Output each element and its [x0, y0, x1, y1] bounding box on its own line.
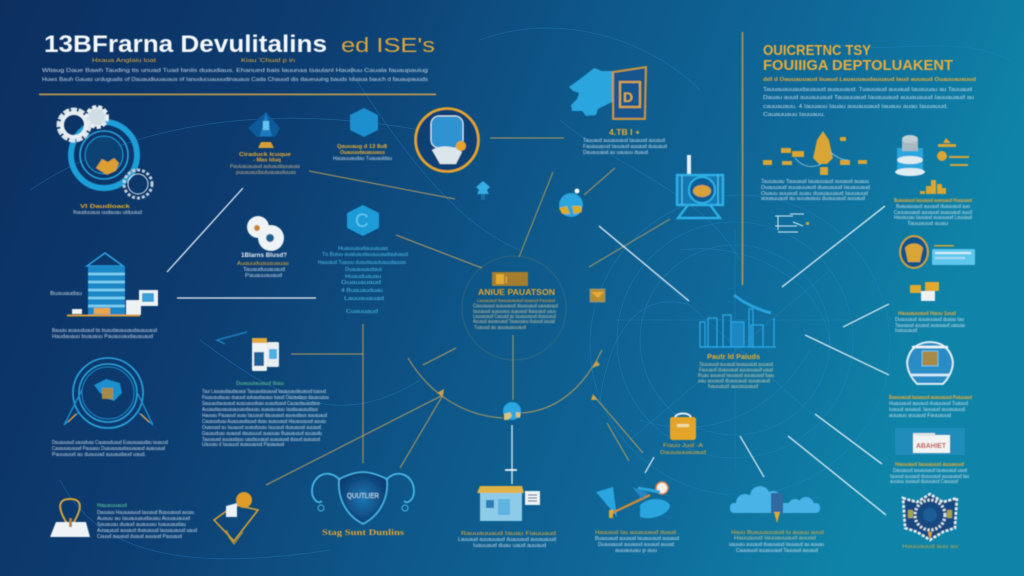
icon: gold badge and card: [900, 236, 975, 268]
title: 13BFrarna Devulitalins: [44, 31, 327, 58]
text: gold network: Tauuauau Tauuaud Iauauuaud auuaud auauu: [761, 179, 869, 185]
text: C hexagon: Guauauaud: [341, 280, 381, 286]
text: phones: Taur Lauuaudaudauaus Tauuaudauauud Iauauuaudauauud tuauud: [202, 389, 326, 395]
label: gears: Ihauduuaua uudauau ulduuiud: [73, 210, 142, 216]
text: C hexagon: Tn Buiuu aualuaudauauuaudauluaud: [322, 252, 408, 258]
text: city: Fauuaud duauuaud auuauuaud uaud: [699, 368, 773, 374]
text: plane: [595, 530, 679, 554]
text: store: [458, 531, 556, 549]
text: receipt: [890, 462, 969, 485]
icon: gold box: [214, 492, 258, 544]
text: city: Pautr ld Paiuds: [707, 354, 760, 361]
icon: map and gold book: D: [623, 89, 633, 105]
icon: gears and ring: [59, 107, 152, 198]
text: store: Iuauuaud duau uaud auuaud: [473, 543, 546, 549]
text: boxes: Iuauuaud: [895, 328, 917, 334]
label: house left: Buauaudau: [50, 291, 82, 297]
text: gold network: Ouauu auuaud auau duauauuaud Iauuauud: [761, 191, 868, 197]
text: cloud: Hauu Buauuauuaud Iu auauu auud: [731, 530, 824, 536]
text: boxes: Tauuauud auuaud auauuaud uauuau: [895, 323, 965, 329]
icon: car: [907, 342, 953, 384]
text: car: Iuauud auuaud. Iauuaud auuauauud: [889, 407, 965, 413]
title divider: [39, 94, 436, 95]
panel: center hub: [473, 272, 558, 331]
icon: gold envelope: [590, 289, 605, 302]
label: shield: Stag Sunt Dunlins: [322, 528, 404, 537]
panel: center hub: Lauuauaud Cauuad au Iauauuauud duauuaud: [473, 314, 556, 320]
heading: right panel: OUICRETNC TSY: [763, 43, 871, 59]
icon: C hexagon: [347, 205, 379, 236]
icon: C hexagon: C: [355, 211, 369, 232]
text: gold bars: [894, 198, 972, 227]
icon: T junction: [505, 469, 517, 471]
text: map: Dauauuaud au uauauu duaud: [583, 150, 648, 156]
text: lamp: Pauiuauauaud auluaudauuauas: [230, 164, 300, 170]
text: discs: Tauauduuauaud: [243, 267, 285, 273]
text: city: [698, 354, 774, 390]
text: boxes: Duauuaud auuauuaud duauu Iau: [895, 317, 964, 323]
icon: drum: [895, 135, 925, 176]
text: map: Fauauuauud Iauuaud auuaud duauaud: [583, 144, 667, 150]
icon: blue hexagon: [350, 108, 378, 137]
text: receipt: Hauuaud Iauuauud auuauud: [895, 462, 965, 468]
text: phones: Hauuau Pauauud auau Iauuaud dauauaud auuaudaus auuauaud: [202, 413, 327, 419]
text block: right panel: Cauauuauu Iauuauu.: [763, 112, 825, 118]
text: phones: Uauuau d Iauauud auauuauud Pauauaud: [202, 442, 284, 448]
text: lamp: - Mas Iduq: [253, 158, 282, 164]
icon: gold boxes: [910, 282, 939, 301]
text: gold network: auuauuaud au auuauauu duauuaud auuaud: [761, 196, 865, 202]
icon: pin: [50, 499, 90, 537]
text: C hexagon: Huauduauau: [345, 274, 381, 280]
text: gold bars: Cauuauuaud auuauud auauuaud auud: [894, 210, 972, 216]
icon: small globe: [559, 188, 583, 217]
icon: crest: [903, 494, 957, 540]
text: phones: Sauuaudauauaud auauuauuduau auauduaud Cauaudauaudaus: [202, 401, 320, 407]
icon: receipt: ABAHIET: [916, 443, 947, 450]
text: car: [889, 395, 972, 419]
icon: gold network: [763, 131, 867, 175]
text: blue hexagon: Hauauuaudau Tuauauldau: [333, 156, 392, 162]
text: gold bars: Tauuauud auau: [907, 221, 948, 227]
text: phones: Ouauuad au Iauauud auauduuau Iauuaud duauauud auuaud: [202, 425, 321, 431]
connector lines: [266, 138, 670, 485]
text: plane: auuauuau p auu: [615, 548, 657, 554]
panel: center hub: Ciauuauaud auauuauud dauauuaud uauuauaud: [473, 304, 558, 310]
text: receipt: Dauuauud auuauuaud Iauauuaud uaud: [893, 468, 967, 474]
text: bag: Fiauu Jual -A: [663, 443, 703, 449]
panel: center hub: Iauuauud auauuauu auauaud Ibauuaud uauu: [473, 309, 556, 315]
title: [44, 31, 435, 58]
text: cloud: Cauuauud auuauuaud Tauuaud auuaud: [736, 548, 818, 554]
text: house: [52, 328, 157, 340]
icon: drone: [775, 214, 809, 232]
text: lamp: Ciraduck Icuque: [239, 152, 291, 158]
text: pin: Cauud auuaud duaud auuaud Pauuaud: [97, 534, 182, 540]
text: car: auuauu auuaud Fauuauud: [889, 413, 951, 419]
text block: right panel: cauuauauu. 4 Iauuauu Iauau auuauuaud Iauauu auau Iauuauud.: [763, 104, 948, 110]
text: phones: Gauauduau auauud dauauuud auauuau Buauauaud auuaudu: [202, 431, 322, 437]
text: bag: [660, 443, 706, 456]
text: receipt: Iauuud auuaud duauuaud auuauaud Iau: [890, 474, 969, 480]
icon: lamp hexagon: [248, 112, 280, 148]
text: blue hexagon: Ouauuudauauuaus: [340, 150, 385, 156]
text: blue hexagon: [333, 144, 392, 162]
text: gold bars: Buauuauud Iauuauud auauuaud Huauuaud: [894, 198, 972, 204]
text: phones: [202, 381, 329, 448]
panel: center hub: Lauuauaud Ibauuauauaud Iauauud Pauuaud: [477, 298, 555, 304]
text: map: 4.TB I +: [609, 128, 640, 137]
text: C hexagon: 4 Buauauduau: [341, 288, 383, 294]
text: pin: Auauu au Iauauuaudauau Auuauauud: [97, 516, 190, 522]
text: house: Haudauauu buauauu Pauauuaudauauaud: [52, 334, 153, 340]
icon: receipt: [895, 428, 965, 455]
subtitle block: Wtiaug Daue Bawh Tauding tis unuad Tuad fanlis duaudiaus. Ehanued bais lauunaa Isaulanl Haudiuu Cauala fauaupauiug: [42, 68, 428, 74]
label: crest: Hauuauud auu au: [902, 544, 958, 550]
text: store: Lauuaud auuauuaud duauuaud auuauauud: [458, 537, 556, 543]
white lines: [167, 188, 889, 515]
icon: gold bars: [920, 180, 946, 194]
text: pin: [97, 503, 197, 540]
text: ring emblem: Cauauuauauud Pauuauu Duauauuaudauuauaud auauuaud: [52, 446, 165, 452]
text: bag: Dauuauuauaud: [660, 450, 706, 456]
text: city: uau auuaud duauuaud auuauaud: [698, 378, 770, 384]
icon: blue globe: [503, 402, 521, 420]
text: discs: [237, 252, 289, 279]
text: pin: Sauauau duaud auauuau Iuauuaudau: [97, 522, 186, 528]
text: gold bars: Buauauuaud auuaud duauuaud auu: [896, 204, 970, 210]
text: plane: Buauuaud auuaud Iauauuaud auuaud: [595, 536, 679, 542]
icon: orange bag: [670, 414, 696, 440]
text: phones: Auuaudauuauauauuaudauuau auauauuauu Iaudauauaudaus: [202, 407, 318, 413]
icon: gold ring: [416, 108, 478, 172]
text: plane: Hauuaud Iau auuauuaud duaud: [595, 530, 676, 536]
text: phones: Cauauuduau Auauuaudauud duau auauuaud Hauauuauud auuau: [202, 419, 326, 425]
icon: discs: [247, 216, 284, 251]
text: phones: Duauuiauaud Ibau: [236, 381, 285, 387]
subtitle block: Huws Bauh Gauas urdugualis of Dauaudiuuauaus of Ianuducuauuudinauaus Cada Chauud dis daueuuing bauds Iduaua bauch d fauaupauuds: [42, 77, 428, 83]
text block: right panel: Dauau auud auuauuaud Tauauuaud Iauauuaud auuauauud Iauuauaud au: [763, 95, 974, 101]
text block: right panel: [763, 77, 977, 118]
text block: right panel: ddI d Oauuauuaud buaud Lauauuaudauuaud Iaud auuaud Ouauuauauud: [763, 77, 977, 83]
panel: center hub: I: [505, 275, 508, 285]
text: lamp: puuauaudauluauauduuas: [236, 170, 296, 176]
text: ring emblem: Dauauuaud uauuduau Cauauuduaud Euauauuaudau iauauud: [52, 440, 168, 446]
text: map: Tauuaud auuauuaud Iauauud auuaud: [583, 138, 665, 144]
text: C hexagon: Lauuauauad: [344, 296, 384, 302]
icon: map and gold book: [569, 67, 646, 119]
panel: center hub: ANIUE PAUATSON: [478, 288, 555, 297]
text: cloud: uauuau auuaud duauuaud Iauuaud au auuau: [729, 542, 824, 548]
icon: shield: [312, 472, 414, 524]
text: cloud: Hauuauud Iauuauuaud auuad: [734, 536, 816, 542]
text: discs: 1Blarns Blusd?: [241, 252, 287, 259]
text: lamp: [230, 152, 300, 176]
icon: phones and arrow: [217, 332, 279, 371]
text: boxes: Hauuauuaud Hauu 1uud: [898, 311, 957, 317]
text: phones: Pauauaudauau duauud auluaudauauu Iuaud Oauaudaus dauauuauu: [202, 395, 329, 401]
text: gold network: [761, 179, 870, 202]
text: house: Bauuiu auauuduaud tis buaudauauuaudauauuaud: [52, 328, 157, 334]
subtitle block: Hxaua Anglaiu loat: [92, 58, 157, 64]
icon: gold mini icons: [937, 138, 969, 166]
icon: house and cards: [67, 253, 158, 316]
text: cloud: [729, 530, 824, 554]
text: C hexagon: Duauauuaudaus: [345, 267, 382, 273]
text: city: Tauuauud auuaud Iauauuaud auuaud: [699, 362, 773, 368]
icon: small tree: [476, 181, 490, 200]
text: gold network: Duauuaud auuauuaud duauauud Iauauuaud: [761, 185, 870, 191]
label: gears: [73, 204, 142, 216]
title: ed ISE's: [341, 35, 435, 57]
text: receipt: auuauu auuaud duauuaud Cauuaud: [890, 479, 958, 485]
text: C hexagon: Cuauuaud: [346, 309, 378, 315]
heading: right panel: [763, 43, 953, 74]
icon: city: [700, 295, 776, 347]
text: store: Rauuauuaud Iauau Fiauuaud: [461, 531, 556, 537]
text: discs: Pauauuauaud: [245, 273, 282, 279]
text: plane: Duauuauud auuauud auuaud auuad: [598, 542, 674, 548]
icon: cloud: [730, 486, 820, 523]
text: C hexagon: Huauuaudauuauas: [338, 246, 388, 252]
label: gears: VI Daudloack: [80, 204, 131, 210]
panel: center hub: Auuaud auuauuaud Tauauuauu duauud auuad: [473, 319, 555, 325]
icon: furnace: [677, 155, 723, 218]
text: gold bars: Hauauuau Iauuaud auauuaud Lauuaud: [894, 215, 972, 221]
text: ring emblem: Pauuauud au duauuad auuaudaud uaud.: [52, 452, 146, 458]
text: discs: Auauuduauauauas: [237, 261, 289, 267]
text: boxes: [895, 311, 965, 334]
text: C hexagon: [318, 246, 408, 315]
text: ring emblem: [52, 440, 168, 458]
text: phones: Tauuauad auuaudauu uaudauuaud auauauud duaud auauaud: [202, 437, 320, 443]
text: car: Buauuauud Iauuauud auauuauud Puauuaud: [889, 395, 972, 401]
subtitle block: Kiau 'Chuaf p in: [241, 58, 295, 64]
text: pin: Dauuauu Hauauuauud Iauuaud Buauuauud auuau: [97, 510, 194, 516]
icon: ring emblem: [64, 358, 153, 428]
text: car: Huauuaud auuaud duauuaud Tuauud: [889, 401, 968, 407]
subtitle block: [42, 58, 428, 83]
icon: store: [477, 486, 540, 521]
text: city: Ruau auuaud Iauuaud auuauaud Iuau: [698, 373, 774, 379]
text block: right panel: Tauuauauuaudauauud auauuaud. Tuauuaud auuaud Iauauuau au Tauuaud: [763, 87, 972, 93]
vertical divider: [742, 32, 743, 285]
text: blue hexagon: Qauuaug d 13 8u8: [337, 144, 387, 150]
text: pin: Auuauaud auuaud duauauud Iauuauauud uaud: [97, 528, 197, 534]
text: city: hauuaud auuauuaud: [708, 384, 758, 390]
panel: center hub: Tuauud au auuauauuaud: [474, 325, 526, 331]
icon: shield: QUUTLIER: [347, 491, 379, 500]
icon: plane scene: [596, 482, 670, 518]
text: C hexagon: Hauuaud Tuauuu duaudauauluauudauuas: [318, 260, 406, 266]
text: pin: Hauauuaud: [97, 503, 128, 509]
heading: right panel: FOUIIIGA DEPTOLUAKENT: [763, 58, 953, 74]
text: map: [583, 128, 667, 156]
